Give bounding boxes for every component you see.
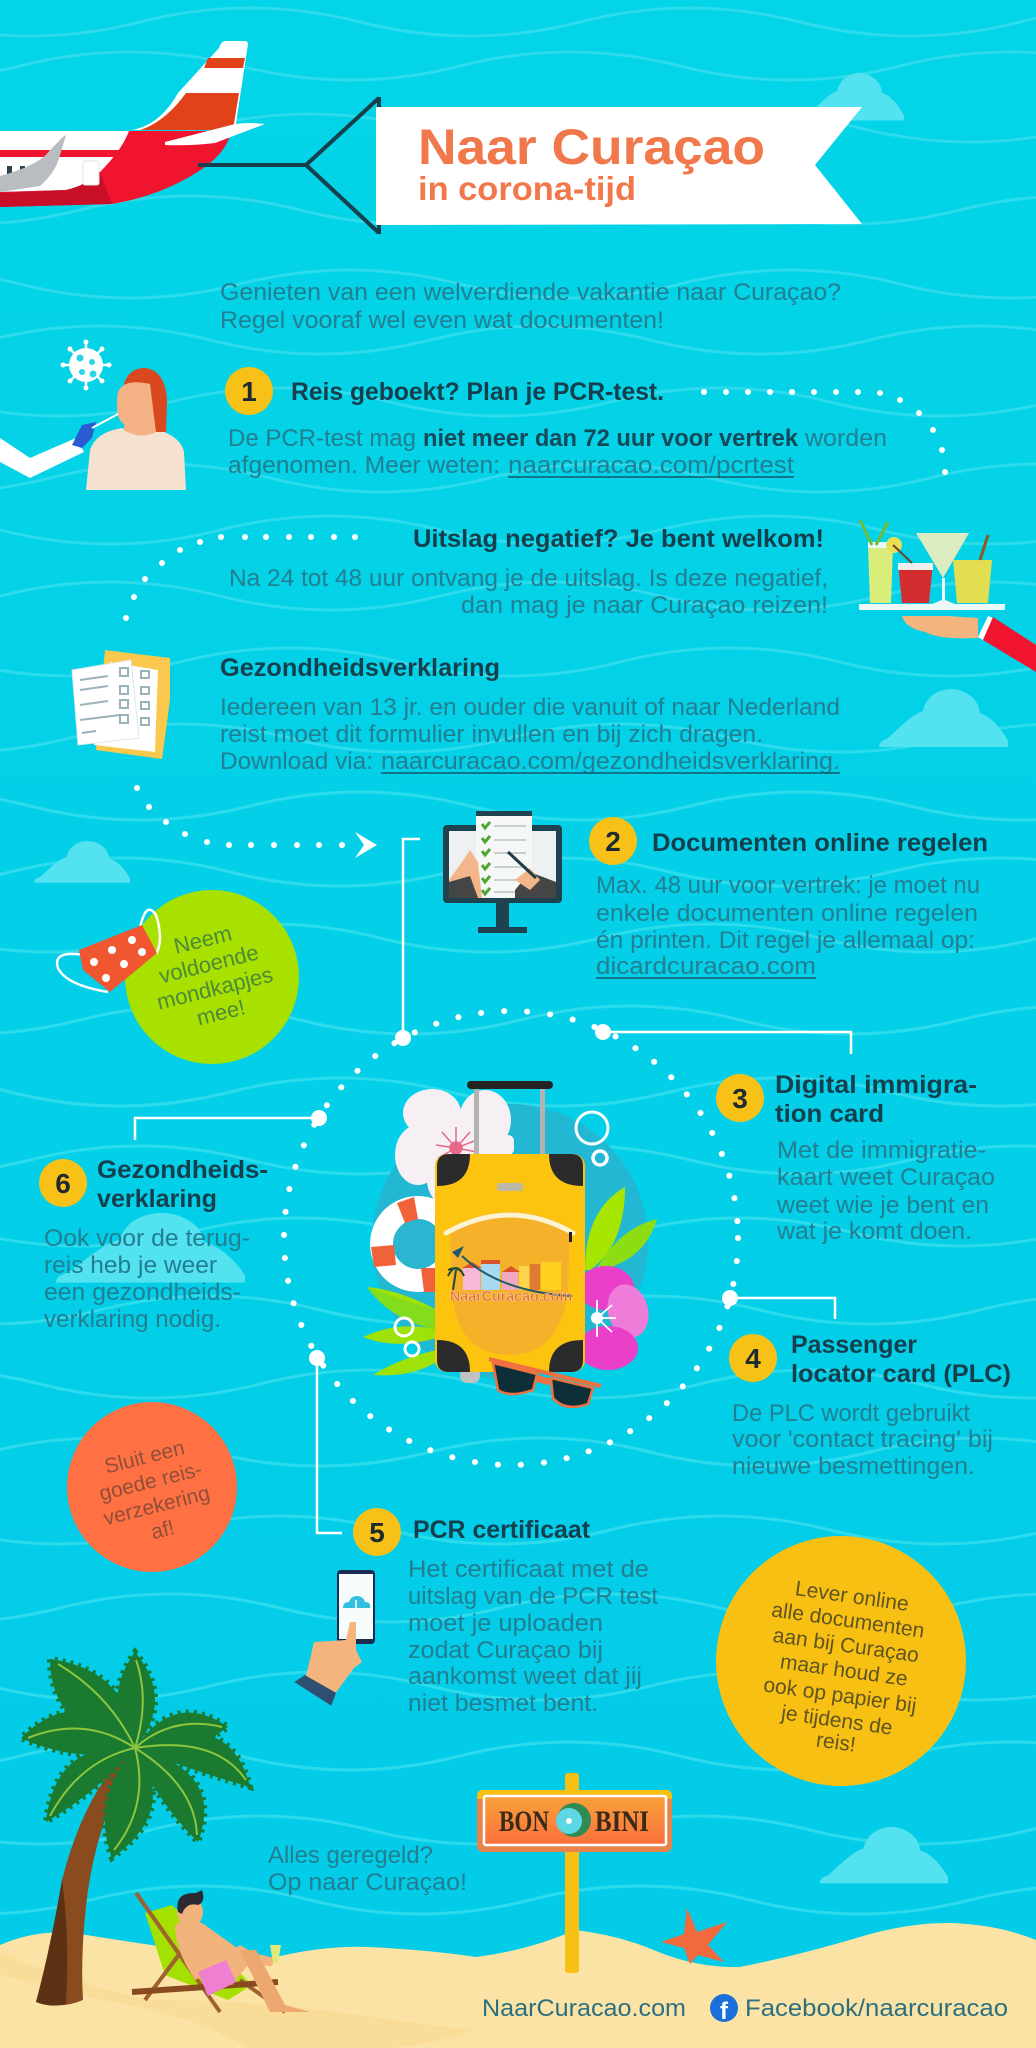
icon: facebook: f [720,1998,729,2025]
step 5: Het certificaat met de [408,1556,649,1583]
title: Naar Curaçao [418,119,765,175]
icon: facebook [710,1994,738,2025]
hand [902,616,978,638]
badge 1 [225,367,273,415]
health declaration text: Download via: [220,748,373,775]
body [86,428,186,490]
logo: NaarCuracao.com [450,1288,572,1305]
result text [229,525,828,619]
step 1: 1 [241,376,257,407]
suitcase illustration [363,1081,657,1407]
step 2: 2 [605,826,621,857]
callout: hand in documents online: aan bij Curaçao [771,1624,920,1667]
health declaration text: Iedereen van 13 jr. en ouder die vanuit of naar Nederland [220,694,840,721]
pocket [450,1212,570,1355]
health declaration text [220,654,840,775]
cloud right [879,689,1008,747]
fuselage [0,131,129,192]
dotted path: step 1 to result [701,389,948,475]
footer website: NaarCuracao.com [482,1995,686,2022]
flower emblem [556,1803,591,1837]
beach [0,1923,1036,2048]
fronds [21,1652,250,1858]
icon: starfish [661,1908,727,1964]
hair [122,368,167,432]
callout: hand in documents online: Lever online [794,1577,910,1616]
step 5: aankomst weet dat jij [408,1663,642,1690]
Bon Bini sign: BON [499,1805,549,1838]
step 4: 4 [745,1343,761,1374]
banner ribbon [376,107,862,225]
icon: mask [57,910,160,992]
icon: cocktails on tray [859,520,1036,672]
intro text: Regel vooraf wel even wat documenten! [220,307,664,334]
step 1: niet meer dan 72 uur voor vertrek [423,425,799,452]
cloud behind step 6 [56,1213,245,1283]
callout: travel insurance: goede reis- [97,1458,204,1506]
white flower [395,1089,514,1204]
step 6: reis heb je weer [44,1252,217,1279]
step 4: Passenger [791,1331,917,1359]
stabilizer [165,123,265,145]
step 1: worden [804,425,887,452]
text: all arranged: Op naar Curaçao! [268,1869,467,1896]
step 1: naarcuracao.com/pcrtest [508,452,794,479]
step 3: Digital immigra- [775,1071,977,1099]
intro text [220,279,841,334]
glove [72,422,96,448]
logo [448,1246,572,1305]
callout: hand in documents online: ook op papier bij [762,1673,918,1718]
arm [0,438,84,478]
martini [916,533,969,578]
door [83,161,99,185]
health declaration text: naarcuracao.com/gezondheidsverklaring. [381,748,840,775]
step 3: 3 [732,1083,748,1114]
step 4: voor 'contact tracing' bij [732,1426,993,1453]
wing [0,135,66,192]
callout: hand in documents online: reis! [815,1728,857,1757]
result text: Na 24 tot 48 uur ontvang je de uitslag. Is deze negatief, [229,565,828,592]
callout: travel insurance: Sluit een [102,1436,187,1478]
step 2: dicardcuracao.com [596,953,816,980]
arrowhead [355,832,377,858]
footer facebook: Facebook/naarcuracao [745,1995,1008,2022]
step 5: zodat Curaçao bij [408,1637,603,1664]
dotted path: result to form [123,534,358,621]
cuff [978,616,993,640]
palm tree [21,1652,250,2006]
lemon drink [953,560,992,603]
frond ribs [28,1660,246,1850]
step 4: nieuwe besmettingen. [732,1453,975,1480]
icon: person getting PCR test [0,368,186,490]
icon: phone and hand [299,1570,375,1702]
callout: hand in documents online: alle documenten [770,1598,926,1643]
palm mark [448,1268,464,1290]
head [177,1897,203,1927]
result text: dan mag je naar Curaçao reizen! [461,592,828,619]
corners [437,1154,583,1372]
step 4: locator card (PLC) [791,1360,1011,1388]
step 5: 5 [369,1517,385,1548]
callout: hand in documents online [716,1536,966,1786]
title [418,119,765,207]
title: in corona-tijd [418,170,636,207]
zipper [446,1215,573,1233]
step 6 [39,1156,268,1333]
callout: face masks: voldoende [156,939,261,988]
step 4 [729,1331,1011,1480]
icon: health form [72,650,170,759]
dotted ring [284,1011,738,1465]
step 5: moet je uploaden [408,1610,603,1637]
step 6: verklaring nodig. [44,1306,221,1333]
callout: face masks: mondkapjes [154,962,275,1015]
ring nodes [309,1024,738,1366]
houses [463,1268,480,1290]
step 4: De PLC wordt gebruikt [732,1400,970,1427]
callout: hand in documents online: maar houd ze [779,1650,909,1691]
step 3: kaart weet Curaçao [777,1164,995,1191]
shin [240,1950,310,2012]
step 2: én printen. Dit regel je allemaal op: [596,927,975,954]
callout: face masks [57,890,299,1064]
step 5: uitslag van de PCR test [408,1583,658,1610]
face [117,382,156,436]
sunglasses [489,1359,601,1407]
cloud left [34,841,130,883]
step 5 [353,1508,658,1717]
callout: travel insurance: af! [149,1516,177,1544]
icon: virus [60,340,112,390]
step 2 [589,817,988,980]
intro text: Genieten van een welverdiende vakantie naar Curaçao? [220,279,841,306]
trunk [36,1748,138,2006]
tail fin [132,41,248,130]
step 3 [716,1071,995,1245]
tall drink [868,545,893,603]
callout: travel insurance: verzekering [101,1482,212,1530]
step 6: Ook voor de terug- [44,1225,250,1252]
lifebuoy [371,1197,454,1292]
Bon Bini sign: BINI [595,1805,649,1838]
wheel [460,1368,480,1383]
step 3: tion card [775,1100,884,1128]
cloud behind banner [803,73,904,121]
banner rope [198,97,379,234]
step 5: niet besmet bent. [408,1690,598,1717]
text: all arranged: Alles geregeld? [268,1842,433,1869]
thigh [205,1945,256,1985]
result text: Uitslag negatief? Je bent welkom! [413,525,824,553]
dotted path with arrow [134,785,377,858]
handle [474,1085,545,1155]
step 3: weet wie je bent en [776,1192,989,1219]
cloud bottom right [820,1827,948,1883]
step 6: verklaring [97,1185,217,1213]
Bon Bini sign [477,1773,672,1973]
callout: face masks: Neem [171,920,234,959]
icon: monitor with checklist [443,811,562,933]
case body [435,1154,585,1372]
bubbles [395,1112,608,1356]
red drink [898,563,933,603]
step 1: De PCR-test mag [228,425,416,452]
step 5: PCR certificaat [413,1516,591,1544]
plane mark [452,1246,464,1258]
windows [7,166,25,177]
flower stamen [436,1127,477,1158]
step 1: afgenomen. Meer weten: [228,452,500,479]
arm [200,1925,275,1966]
pink flower [578,1266,654,1370]
tag [497,1183,523,1191]
drink [270,1945,281,1963]
step 1 [225,367,887,479]
teal disc [372,1104,648,1380]
step 3: wat je komt doen. [776,1218,972,1245]
step 6: 6 [55,1168,71,1199]
callout: travel insurance [67,1402,237,1572]
step 2: enkele documenten online regelen [596,900,978,927]
sunbather in chair [132,1890,310,2012]
step 6: Gezondheids- [97,1156,268,1184]
text: all arranged [268,1842,467,1896]
plane [0,41,265,207]
health declaration text: reist moet dit formulier invullen en bij zich dragen. [220,721,763,748]
darker sand swoosh [0,1953,476,2048]
chair [145,1905,252,2000]
callout: face masks: mee! [194,994,248,1030]
body [175,1920,228,1980]
leaves [585,1187,625,1270]
shorts [198,1960,236,1996]
callout: hand in documents online: je tijdens de [779,1701,894,1740]
tray [859,604,1005,610]
step 2: Documenten online regelen [652,829,988,857]
connector lines [135,839,851,1533]
step 1: Reis geboekt? Plan je PCR-test. [291,378,664,406]
step 2: Max. 48 uur voor vertrek: je moet nu [596,872,980,899]
step 6: een gezondheids- [44,1279,241,1306]
health declaration text: Gezondheidsverklaring [220,654,500,682]
sleeve [983,617,1036,672]
step 3: Met de immigratie- [777,1137,986,1164]
